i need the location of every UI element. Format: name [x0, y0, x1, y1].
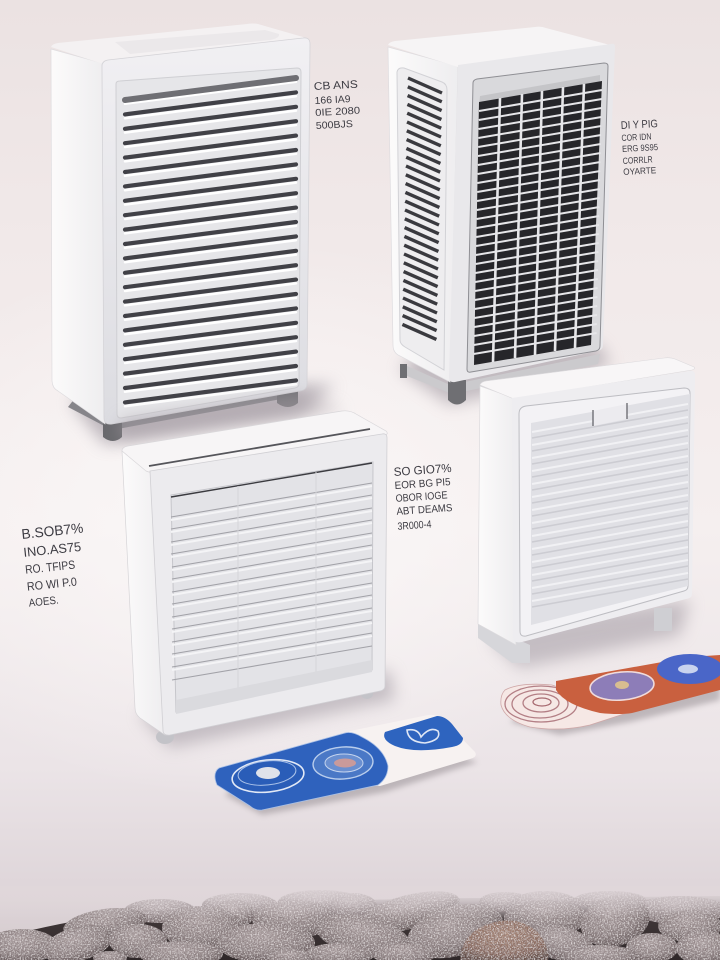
front face [102, 38, 310, 424]
caption: centre lower unit: OBOR IOGE [395, 489, 448, 505]
back row stones [124, 890, 720, 924]
caption: top right unit: ERG 9S95 [622, 142, 658, 154]
top fade [0, 886, 720, 918]
side panel [122, 451, 165, 735]
caption: top left unit: 166 IA9 [314, 94, 351, 107]
caption: centre lower unit: SO GIO7% [393, 461, 452, 479]
heart mark [407, 729, 439, 743]
button [593, 403, 627, 426]
device: wide slatted unit, lower left [120, 395, 395, 748]
slats [125, 78, 296, 406]
louvres [531, 394, 690, 625]
front face [150, 434, 387, 735]
caption: top right unit: DI Y PIG [621, 118, 658, 132]
slats [171, 463, 372, 698]
mat shadow [225, 750, 478, 815]
lower frame strip [176, 660, 372, 714]
blue panel [215, 732, 388, 810]
top surface [122, 411, 387, 472]
base and feet [68, 390, 298, 441]
feet [156, 689, 373, 744]
caption: left of lower unit: AOES. [28, 595, 59, 610]
orange panel [556, 655, 720, 714]
side grille [397, 68, 447, 370]
grille panel [171, 462, 373, 712]
front face [449, 44, 615, 382]
mid row stones [0, 883, 720, 960]
large disc [231, 756, 305, 796]
device: grid-front unit, top right [388, 27, 615, 405]
caption: left of lower unit: RO. TFIPS [25, 558, 76, 577]
caption: left of lower unit: INO.AS75 [23, 539, 82, 560]
top surface [480, 358, 695, 399]
orange mat [501, 654, 720, 735]
side panel [51, 49, 105, 424]
feet [478, 608, 672, 663]
white base [300, 715, 476, 786]
shadow cast behind top [120, 395, 345, 440]
pale spiral end [501, 684, 630, 729]
caption: left of lower unit: B.SOB7% [21, 520, 84, 542]
caption: top left unit: 500BJS [316, 119, 353, 132]
device: louvred unit, lower right [478, 358, 695, 668]
caption: top left unit: CB ANS [314, 79, 358, 93]
front grille frame [467, 63, 608, 372]
dark gaps [0, 896, 720, 960]
caption: top left unit: 0IE 2080 [315, 106, 361, 119]
caption: top right unit: OYARTE [623, 165, 656, 177]
dark grid [474, 81, 602, 365]
inner panel [519, 388, 690, 636]
front face [512, 371, 695, 642]
mat shadow [510, 680, 720, 735]
blue mat [215, 715, 478, 815]
caption: top right unit: COR IDN [621, 131, 652, 143]
side panel [388, 47, 458, 382]
blue disc [657, 654, 720, 684]
device: tall slatted unit, top left [51, 24, 335, 445]
caption: left of lower unit: RO WI P.0 [26, 575, 78, 594]
pebble ground [0, 883, 720, 960]
floor shadow [400, 345, 610, 405]
floor shadow [490, 600, 690, 668]
caption: top right unit: CORRLR [622, 154, 653, 166]
top surface [388, 27, 613, 67]
small disc [312, 745, 374, 781]
base and foot [400, 354, 600, 404]
grille panel [116, 68, 301, 418]
floor shadow [70, 380, 335, 445]
caption: centre lower unit: EOR BG PI5 [394, 476, 451, 492]
side panel [478, 386, 516, 645]
caption: centre lower unit: ABT DEAMS [396, 502, 453, 518]
top surface [51, 24, 308, 64]
floor shadow [140, 670, 395, 748]
purple disc [589, 669, 655, 703]
right blue tab [384, 716, 463, 750]
caption: centre lower unit: 3R000-4 [397, 519, 432, 533]
